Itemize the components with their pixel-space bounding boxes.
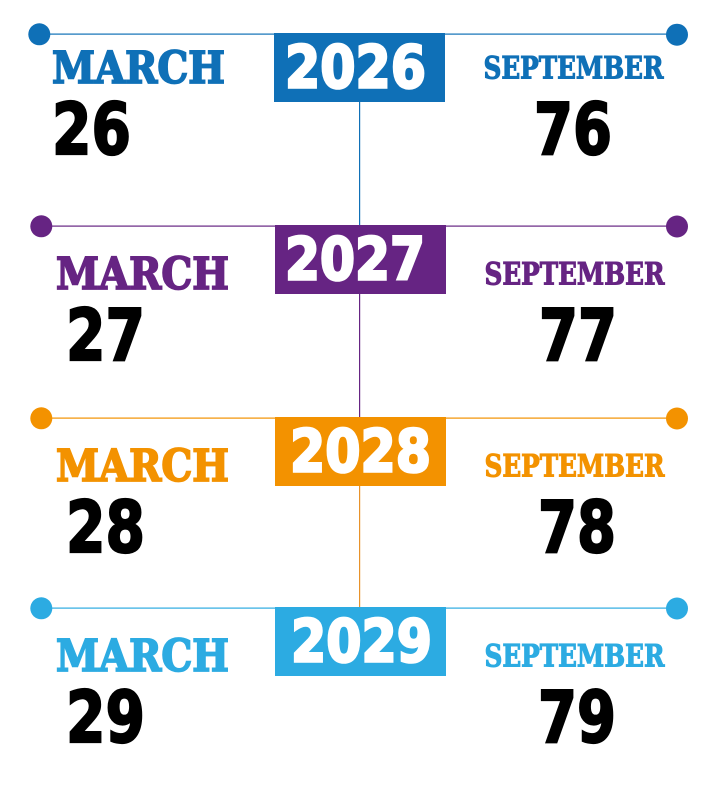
- icon: 2027 right dot: [666, 216, 688, 238]
- label: September 2028: SEPTEMBER: [484, 448, 665, 484]
- icon: 2028 right dot: [666, 408, 688, 430]
- icon: 2026 right dot: [666, 24, 688, 46]
- icon: 2028 left dot: [30, 407, 52, 429]
- connector: 2027 vertical line: [359, 294, 360, 418]
- year badge: 2027: 2027: [285, 225, 425, 294]
- label: September 2026: SEPTEMBER: [484, 50, 664, 86]
- timeline row: 2028: [30, 407, 688, 608]
- timeline row: 2027: [30, 215, 688, 418]
- connector: 2026 horizontal line: [39, 34, 677, 35]
- timeline row: 2026: [28, 23, 688, 226]
- connector: 2028 horizontal line: [41, 418, 677, 419]
- label: September 2027: SEPTEMBER: [484, 256, 665, 292]
- number: March 2029: 29: [66, 676, 145, 759]
- connector: 2029 horizontal line: [41, 608, 677, 609]
- number: September 2027: 77: [539, 294, 617, 377]
- year badge: 2028: 2028: [290, 417, 431, 486]
- label: September 2029: SEPTEMBER: [484, 638, 665, 674]
- year badge: 2029: 2029: [291, 607, 432, 676]
- connector: 2026 vertical line: [359, 102, 360, 226]
- label: March 2026: MARCH: [52, 43, 225, 94]
- label: March 2029: MARCH: [56, 631, 229, 682]
- year badge: 2026: 2026: [285, 33, 426, 102]
- number: September 2026: 76: [534, 88, 612, 171]
- icon: 2026 left dot: [28, 23, 50, 45]
- connector: 2027 horizontal line: [41, 226, 677, 227]
- icon: 2027 left dot: [30, 215, 52, 237]
- connector: 2028 vertical line: [359, 486, 360, 608]
- label: March 2028: MARCH: [56, 441, 229, 492]
- number: March 2026: 26: [52, 88, 131, 171]
- number: March 2028: 28: [66, 486, 145, 569]
- number: March 2027: 27: [66, 294, 145, 377]
- icon: 2029 right dot: [666, 598, 688, 620]
- timeline row: 2029: [30, 597, 688, 759]
- label: March 2027: MARCH: [56, 249, 229, 300]
- icon: 2029 left dot: [30, 597, 52, 619]
- number: September 2028: 78: [538, 486, 616, 569]
- number: September 2029: 79: [538, 676, 616, 759]
